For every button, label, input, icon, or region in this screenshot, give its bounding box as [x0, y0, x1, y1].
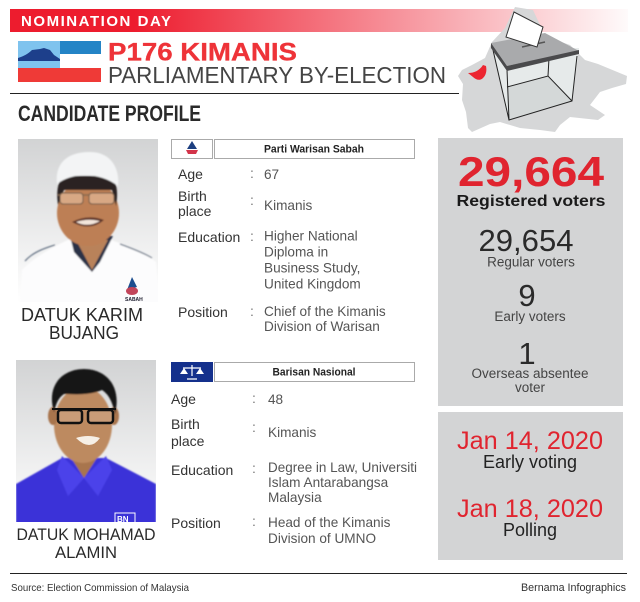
- candidate 2 details: place: [171, 433, 205, 449]
- candidate 2 details: Division of UMNO: [268, 531, 376, 546]
- candidate 2 details: :: [252, 460, 256, 476]
- candidate 1 details: Age: [178, 166, 203, 182]
- flag of Sabah: [18, 41, 101, 82]
- panel: key dates: Polling: [503, 520, 557, 540]
- panel: voter statistics: Regular voters: [487, 254, 575, 270]
- candidate 2 details: Age: [171, 391, 196, 407]
- name: Datuk Karim Bujang: DATUK KARIM: [21, 305, 143, 325]
- candidate 1 details: United Kingdom: [264, 276, 361, 292]
- party header: Parti Warisan Sabah: [172, 140, 414, 158]
- candidate 2 details: Malaysia: [268, 490, 322, 505]
- panel: key dates: Jan 18, 2020: [457, 495, 603, 523]
- panel: candidate 1 photo: SABAH: [125, 297, 143, 303]
- candidate 1 details: Kimanis: [264, 198, 313, 213]
- party header: Barisan Nasional: Barisan Nasional: [272, 366, 356, 378]
- candidate 2 details: Position: [171, 515, 221, 531]
- candidate 2 details: Degree in Law, Universiti: [268, 460, 417, 475]
- icon: ballot box: [491, 12, 579, 120]
- candidate 1 details: :: [250, 303, 254, 319]
- panel: voter statistics: Early voters: [494, 309, 566, 324]
- candidate 1 details: Business Study,: [264, 260, 360, 276]
- heading: candidate profile: CANDIDATE PROFILE: [18, 101, 201, 126]
- name: Datuk Karim Bujang: BUJANG: [49, 323, 119, 343]
- candidate 1 details: Higher National: [264, 228, 358, 244]
- candidate 2 details: Head of the Kimanis: [268, 515, 391, 530]
- panel: voter statistics: 29,664: [458, 148, 605, 195]
- candidate 1 details: [178, 165, 386, 334]
- candidate 1 details: :: [250, 228, 254, 244]
- candidate 2 details: Education: [171, 462, 233, 478]
- candidate 1 details: 67: [264, 167, 279, 182]
- name: Datuk Mohamad Alamin: ALAMIN: [55, 543, 117, 562]
- candidate 1 details: Position: [178, 304, 228, 320]
- panel: candidate 1 photo: [18, 139, 160, 304]
- candidate 2 details: :: [252, 390, 256, 406]
- candidate 2 details: 48: [268, 392, 283, 407]
- party header: Barisan Nasional: [171, 362, 414, 382]
- title: PARLIAMENTARY BY-ELECTION: [108, 62, 446, 88]
- candidate 1 details: :: [250, 165, 254, 181]
- candidate 1 details: Diploma in: [264, 244, 328, 260]
- map: Sabah silhouette: [458, 7, 627, 132]
- name: Datuk Karim Bujang: [21, 305, 143, 343]
- candidate 2 details: Kimanis: [268, 425, 317, 440]
- panel: voter statistics: 29,654: [478, 223, 574, 258]
- candidate 2 details: Birth: [171, 416, 200, 432]
- panel: candidate 2 photo: BN: [117, 515, 129, 524]
- candidate 2 details: Islam Antarabangsa: [268, 475, 389, 490]
- agency credit: Bernama Infographics: [521, 582, 626, 594]
- candidate 2 details: [171, 390, 417, 546]
- panel: voter statistics: 1: [518, 336, 536, 371]
- candidate 1 details: Division of Warisan: [264, 319, 380, 334]
- panel: voter statistics: [438, 138, 623, 406]
- name: Datuk Mohamad Alamin: [16, 525, 156, 562]
- title: [108, 38, 446, 88]
- panel: key dates: [438, 412, 623, 560]
- candidate 1 details: Chief of the Kimanis: [264, 304, 386, 319]
- panel: key dates: Early voting: [483, 452, 577, 472]
- party header: Parti Warisan Sabah: Parti Warisan Sabah: [264, 144, 364, 156]
- panel: key dates: Jan 14, 2020: [457, 427, 603, 455]
- candidate 2 details: :: [252, 419, 256, 435]
- header banner: nomination day: NOMINATION DAY: [21, 13, 172, 30]
- panel: candidate 2 photo: [16, 360, 156, 524]
- name: Datuk Mohamad Alamin: DATUK MOHAMAD: [16, 525, 156, 544]
- map highlight: Kimanis: [468, 65, 486, 80]
- header banner: nomination day: [10, 9, 628, 32]
- source credit: Source: Election Commission of Malaysia: [11, 582, 189, 594]
- panel: voter statistics: Overseas absentee: [471, 366, 589, 381]
- panel: voter statistics: voter: [515, 380, 546, 395]
- candidate 2 details: :: [252, 513, 256, 529]
- candidate 1 details: Education: [178, 229, 240, 245]
- candidate 1 details: :: [250, 192, 254, 208]
- icon: ballot paper: [506, 12, 543, 47]
- candidate 1 details: Birth: [178, 188, 207, 204]
- map of Sabah with ballot box: [458, 7, 627, 132]
- panel: voter statistics: 9: [518, 278, 536, 313]
- candidate 1 details: place: [178, 203, 212, 219]
- title: P176 KIMANIS: [108, 38, 297, 66]
- panel: voter statistics: Registered voters: [456, 193, 606, 210]
